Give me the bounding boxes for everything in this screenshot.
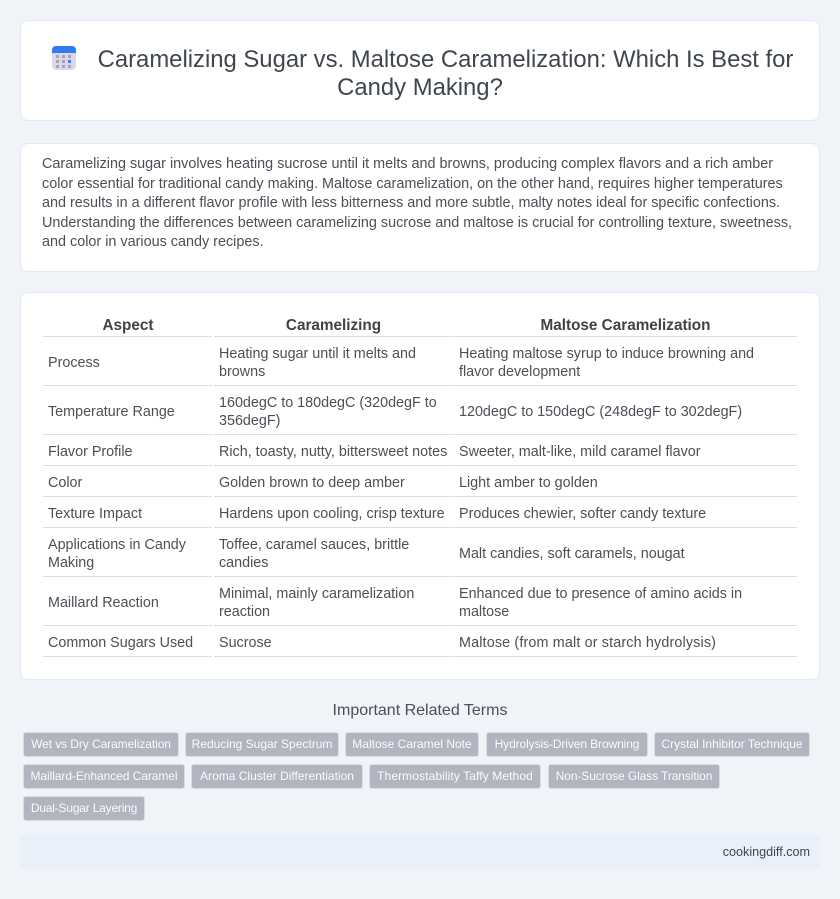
related term tags bbox=[23, 732, 810, 821]
table header: Caramelizing bbox=[286, 317, 381, 334]
row: applications: Malt candies, soft caramels, nougat bbox=[459, 546, 685, 562]
row: common sugars: Common Sugars Used bbox=[48, 635, 193, 651]
row: flavor profile bbox=[48, 444, 701, 460]
row: process: Heating maltose syrup to induce browning and bbox=[459, 346, 754, 362]
row: maillard reaction: Enhanced due to presence of amino acids in bbox=[459, 586, 742, 602]
row: color: Color bbox=[48, 475, 82, 491]
row: texture impact: Texture Impact bbox=[48, 506, 142, 522]
row: flavor profile: Sweeter, malt-like, mild caramel flavor bbox=[459, 444, 701, 460]
row: maillard reaction bbox=[48, 586, 742, 620]
footer source text: cookingdiff.com bbox=[723, 845, 810, 859]
table header: Aspect bbox=[102, 317, 154, 334]
title: Caramelizing Sugar vs. Maltose Caramelization: Which Is Best for bbox=[98, 46, 793, 73]
row: flavor profile: Rich, toasty, nutty, bittersweet notes bbox=[219, 444, 447, 460]
row: process: Process bbox=[48, 355, 100, 371]
row: temperature range bbox=[48, 395, 742, 429]
description panel bbox=[20, 143, 820, 272]
related term tags: Dual-Sugar Layering bbox=[31, 801, 137, 815]
title bbox=[98, 46, 793, 101]
description text: color essential for traditional candy making. Maltose caramelization, on the other hand, requires higher temperatures bbox=[42, 176, 783, 192]
row: maillard reaction: Minimal, mainly caramelization bbox=[219, 586, 414, 602]
title: Candy Making? bbox=[337, 74, 503, 101]
table header bbox=[102, 317, 710, 334]
row: color: Light amber to golden bbox=[459, 475, 598, 491]
row: maillard reaction: Maillard Reaction bbox=[48, 595, 159, 611]
row: process bbox=[48, 346, 754, 380]
description text: Caramelizing sugar involves heating sucrose until it melts and browns, producing complex flavors and a rich amber bbox=[42, 156, 773, 172]
row: texture impact: Produces chewier, softer candy texture bbox=[459, 506, 706, 522]
related term tags: Maltose Caramel Note bbox=[352, 737, 472, 751]
table header: Maltose Caramelization bbox=[540, 317, 710, 334]
related term tags: Hydrolysis-Driven Browning bbox=[495, 737, 639, 751]
row: applications: Applications in Candy bbox=[48, 537, 186, 553]
header panel bbox=[20, 20, 820, 121]
row: color bbox=[48, 475, 598, 491]
row: texture impact: Hardens upon cooling, crisp texture bbox=[219, 506, 445, 522]
row: temperature range: 120degC to 150degC (248degF to 302degF) bbox=[459, 404, 742, 420]
description text: Understanding the differences between caramelizing sucrose and maltose is crucial for controlling texture, sweetness, bbox=[42, 215, 792, 231]
related term tags: Wet vs Dry Caramelization bbox=[31, 737, 171, 751]
row: temperature range: Temperature Range bbox=[48, 404, 175, 420]
row: color: Golden brown to deep amber bbox=[219, 475, 405, 491]
icon: calendar bbox=[52, 46, 76, 70]
row: process: browns bbox=[219, 364, 265, 380]
row: process: flavor development bbox=[459, 364, 580, 380]
comparison table panel bbox=[20, 292, 820, 680]
row: common sugars bbox=[48, 635, 716, 651]
row: common sugars: Sucrose bbox=[219, 635, 272, 651]
related term tags: Aroma Cluster Differentiation bbox=[200, 769, 354, 783]
row: applications: Toffee, caramel sauces, brittle bbox=[219, 537, 409, 553]
description text bbox=[42, 156, 792, 250]
row: applications: candies bbox=[219, 555, 268, 571]
related terms heading: Important Related Terms bbox=[333, 702, 507, 719]
related term tags: Non-Sucrose Glass Transition bbox=[556, 769, 712, 783]
row: common sugars: Maltose (from malt or starch hydrolysis) bbox=[459, 635, 716, 651]
row: process: Heating sugar until it melts and bbox=[219, 346, 416, 362]
description text: and results in a different flavor profile with less bitterness and more subtle, malty notes ideal for specific confections. bbox=[42, 195, 780, 211]
row: maillard reaction: reaction bbox=[219, 604, 270, 620]
comparison table bbox=[43, 317, 797, 657]
row: texture impact bbox=[48, 506, 706, 522]
footer bar bbox=[20, 835, 820, 869]
row: applications: Making bbox=[48, 555, 94, 571]
row: maillard reaction: maltose bbox=[459, 604, 509, 620]
row: flavor profile: Flavor Profile bbox=[48, 444, 132, 460]
related term tags: Crystal Inhibitor Technique bbox=[661, 737, 803, 751]
row: temperature range: 356degF) bbox=[219, 413, 280, 429]
related term tags: Maillard-Enhanced Caramel bbox=[30, 769, 178, 783]
related term tags: Thermostability Taffy Method bbox=[377, 769, 533, 783]
row: applications bbox=[48, 537, 685, 571]
description text: and color in various candy recipes. bbox=[42, 234, 264, 250]
row: temperature range: 160degC to 180degC (320degF to bbox=[219, 395, 437, 411]
related term tags: Reducing Sugar Spectrum bbox=[192, 737, 332, 751]
